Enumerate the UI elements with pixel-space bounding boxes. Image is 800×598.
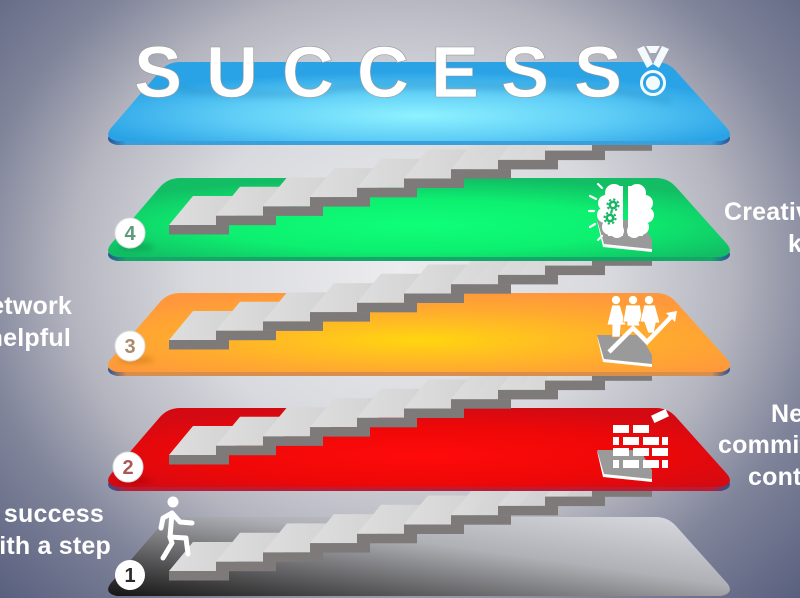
number badge 4: 4 (124, 223, 136, 245)
icon: team and rising arrow on tile (597, 296, 677, 367)
plate 4: green level (108, 178, 730, 261)
title: SUCCESS (134, 33, 622, 113)
label: level 3 text (0, 292, 72, 352)
icon: medal (637, 46, 669, 94)
label: level 4 text (724, 198, 800, 258)
number badge 3: 3 (124, 336, 136, 358)
plate 5: blue top level (108, 62, 730, 145)
number badge 4 (115, 218, 154, 250)
plate 3: orange level (108, 293, 730, 376)
plate 2: red level (108, 408, 730, 491)
stairs on level 2 (169, 342, 676, 464)
icon: walking person (161, 496, 192, 558)
label: level 2 text (718, 400, 800, 491)
stairs on level 3 (169, 227, 676, 350)
number badge 1: 1 (124, 565, 136, 587)
plate 1: grey base level (108, 517, 730, 596)
number badge 2 (113, 452, 152, 484)
number badge 1 (115, 560, 145, 590)
icon: brick wall on tile (597, 409, 669, 482)
number badge 3 (115, 331, 154, 363)
label: level 1 text (0, 500, 111, 560)
stairs on level 1 (169, 458, 676, 580)
stairs on level 4 (169, 112, 676, 234)
number badge 2: 2 (122, 457, 134, 479)
stair shadow on top plate (180, 86, 670, 102)
icon: brain with gears on tile (589, 184, 654, 252)
